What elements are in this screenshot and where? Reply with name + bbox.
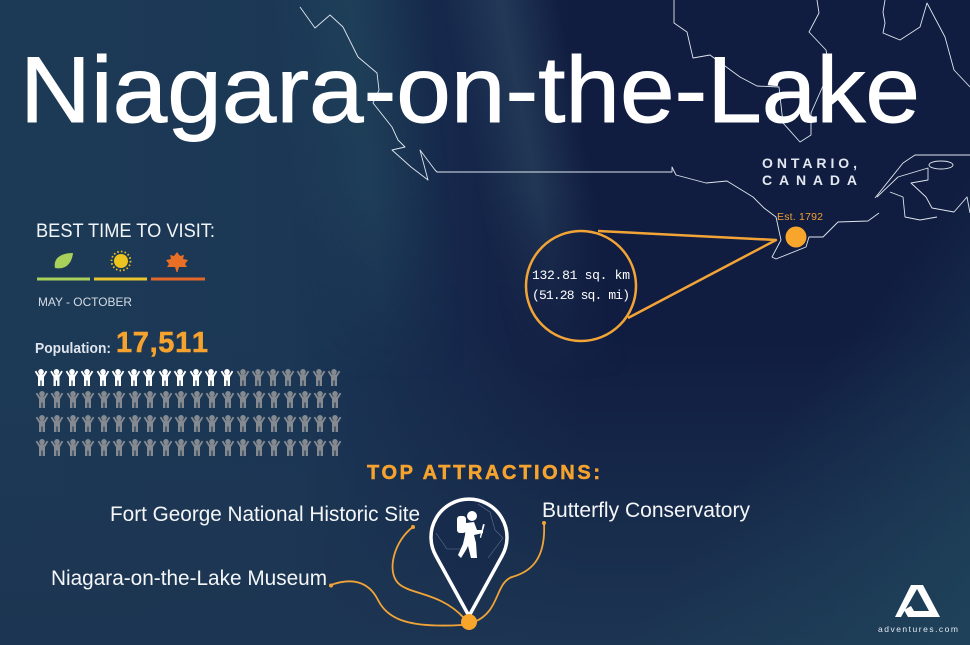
bar: summer [94, 278, 147, 280]
location label: Ontario, Canada: ONTARIO, [762, 155, 857, 171]
logo: adventures.com [878, 585, 958, 634]
row 2 [36, 391, 341, 408]
population figure: 17,511 [116, 327, 208, 359]
icon: autumn maple leaf [166, 252, 188, 272]
attraction labels [51, 499, 750, 590]
text: season months: MAY - OCTOBER [38, 295, 132, 309]
area callout [526, 231, 776, 341]
map pin with hiker icon [431, 499, 507, 630]
population figure [35, 327, 208, 359]
season icons and bars [37, 252, 205, 280]
title: Niagara-on-the-Lake [20, 37, 920, 142]
pin base dot [461, 614, 477, 630]
heading: best time to visit: BEST TIME TO VISIT: [36, 221, 215, 242]
row 1 [35, 369, 233, 386]
row 4 [36, 439, 341, 456]
row 3 [36, 415, 341, 432]
location marker: established 1792: Est. 1792 [777, 211, 823, 223]
attraction end dots [329, 521, 546, 588]
location label: Ontario, Canada: CANADA [762, 172, 857, 188]
icon: hiker [457, 511, 485, 558]
icon: summer sun [112, 252, 130, 270]
attraction labels: Niagara-on-the-Lake Museum [51, 567, 327, 590]
area callout: (51.28 sq. mi) [532, 288, 630, 303]
population figure: Population: [35, 340, 111, 357]
logo: adventures.com: adventures.com [878, 624, 958, 634]
map of Canada outline [300, 0, 970, 259]
bar: autumn [151, 278, 205, 280]
area callout: 132.81 sq. km [532, 268, 630, 283]
attraction labels: Butterfly Conservatory [542, 499, 750, 522]
attraction labels: Fort George National Historic Site [110, 503, 420, 526]
heading: top attractions: TOP ATTRACTIONS: [367, 462, 600, 484]
attraction connector lines [331, 523, 544, 626]
location label: Ontario, Canada [762, 155, 857, 188]
icon: spring leaf [55, 253, 73, 268]
faint map inside pin [436, 504, 503, 558]
bar: spring [37, 278, 90, 280]
pictogram: population people [35, 369, 341, 456]
location marker: established 1792 [777, 211, 823, 248]
